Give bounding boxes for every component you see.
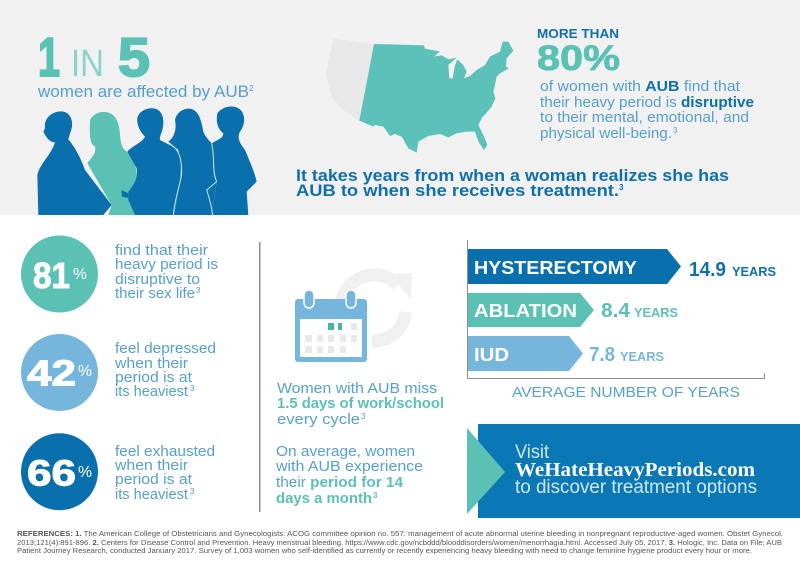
heading: 1 in 5: 5	[118, 26, 150, 88]
stat: 66 percent: 66	[27, 452, 76, 494]
callout: visit website: to discover treatment options	[515, 477, 757, 498]
icon: refresh arrow	[341, 273, 412, 341]
stat: 66 percent: its heaviest	[115, 486, 189, 503]
map: western states	[326, 38, 374, 121]
subheading: women affected: 2	[249, 84, 254, 93]
bar: ablation: YEARS	[634, 305, 678, 320]
text: days of work missed: every cycle	[277, 411, 360, 428]
text: period for 14 days: their period for 14	[276, 474, 404, 491]
heading: 1 in 5: 1	[38, 26, 60, 88]
bar: IUD: IUD	[474, 344, 509, 365]
stat: 42 percent: %	[78, 363, 92, 380]
references: Patient Journey Research, conducted January 2017. Survey of 1,003 women who self-identified as currently or recently experiencing heavy bleeding with need to change feminine hygiene product every hour or more.	[17, 548, 752, 555]
text: days of work missed	[277, 380, 444, 428]
bar: IUD: 7.8	[589, 344, 615, 366]
stat: 81 percent: 81	[33, 255, 70, 296]
callout: years to treatment: AUB to when she receives treatment.	[296, 181, 619, 200]
stat: 81 percent: %	[73, 266, 87, 283]
bar: hysterectomy: HYSTERECTOMY	[474, 257, 638, 278]
map of the United States	[326, 38, 513, 153]
subheading: women affected: women are affected by AUB	[37, 82, 249, 101]
text: days of work missed: Women with AUB miss	[277, 380, 437, 397]
stat: 42 percent: 3	[190, 384, 195, 393]
text: disruptive to well-being: their heavy period is disruptive	[540, 94, 754, 111]
references	[17, 531, 783, 555]
stat: 42 percent: 42	[27, 352, 76, 394]
references: 2013;121(4):891-896. 2. Centers for Disease Control and Prevention. Heavy menstrual bleeding. https://www.cdc.gov/ncbddd/blooddisorders/women/menorrhagia.html. Accessed July 05, 2017. 3. Hologic, Inc. Data on File; AUB	[17, 540, 782, 547]
stat: 81 percent: their sex life	[115, 285, 195, 302]
stat: 66 percent	[21, 433, 215, 510]
stat: 81 percent: 3	[196, 286, 201, 295]
stat: 66 percent: %	[78, 464, 92, 481]
map: highlighted states	[359, 42, 513, 153]
bar: hysterectomy: YEARS	[732, 264, 776, 279]
bar: hysterectomy: 14.9	[689, 259, 726, 281]
stat: 81 percent: find that their	[115, 242, 208, 259]
stat: 42 percent: when their	[114, 355, 188, 372]
stat: 42 percent: feel depressed	[115, 340, 216, 357]
icon: calendar	[295, 290, 367, 362]
stat: 42 percent: period is at	[115, 369, 193, 386]
bar: ablation: ABLATION	[474, 300, 577, 321]
text: disruptive to well-being: to their mental, emotional, and	[540, 109, 749, 126]
stat: 81 percent	[21, 236, 218, 312]
callout: visit website	[467, 424, 800, 518]
text: disruptive to well-being: physical well-being.	[540, 125, 672, 142]
bar: IUD	[468, 336, 664, 371]
text: disruptive to well-being: 3	[673, 126, 678, 135]
heading: 1 in 5: IN	[71, 43, 104, 85]
text: disruptive to well-being: of women with AUB find that	[540, 78, 741, 95]
bar: IUD: YEARS	[620, 349, 664, 364]
text: disruptive to well-being	[540, 78, 754, 142]
stat: 42 percent: its heaviest	[115, 383, 189, 400]
text: period for 14 days: 3	[373, 491, 378, 500]
stat: more than 80%: 80%	[537, 39, 620, 78]
stat: more than 80%	[537, 26, 620, 78]
stat: 66 percent: period is at	[115, 471, 193, 488]
text: period for 14 days	[275, 443, 423, 507]
bar: hysterectomy	[468, 249, 776, 284]
stat: 66 percent: 3	[190, 487, 195, 496]
bar: ablation	[468, 293, 678, 327]
text: days of work missed: 3	[361, 412, 366, 421]
stat: 81 percent: heavy period is	[115, 256, 218, 273]
callout: visit website: Visit	[515, 442, 550, 463]
text: period for 14 days: On average, women	[276, 443, 415, 460]
stat: more than 80%: MORE THAN	[537, 26, 619, 41]
heading: 1 in 5	[38, 26, 150, 88]
text: days of work missed: 1.5 days of work/school	[277, 395, 444, 412]
text: period for 14 days: with AUB experience	[275, 458, 423, 475]
icon: silhouettes of five women	[37, 106, 257, 215]
callout: years to treatment: It takes years from when a woman realizes she has	[296, 166, 729, 185]
stat: 42 percent	[21, 334, 216, 411]
stat: 66 percent: feel exhausted	[115, 443, 215, 460]
callout: years to treatment	[296, 166, 729, 200]
callout: years to treatment: 3	[619, 183, 624, 192]
axis label: AVERAGE NUMBER OF YEARS	[512, 384, 740, 401]
text: period for 14 days: days a month	[276, 490, 372, 507]
top grey panel	[0, 0, 800, 215]
callout: visit website: WeHateHeavyPeriods.com	[515, 459, 755, 481]
references: REFERENCES: 1. The American College of Obstetricians and Gynecologists. ACOG committee opinion no. 557: management of acute abnormal uterine bleeding in nonpregnant reproductive-aged women. Obstet Gynecol.	[17, 531, 783, 538]
stat: 66 percent: when their	[114, 457, 188, 474]
bar chart: years to treatment	[468, 240, 776, 401]
bar: ablation: 8.4	[601, 300, 631, 322]
stat: 81 percent: disruptive to	[115, 271, 200, 288]
